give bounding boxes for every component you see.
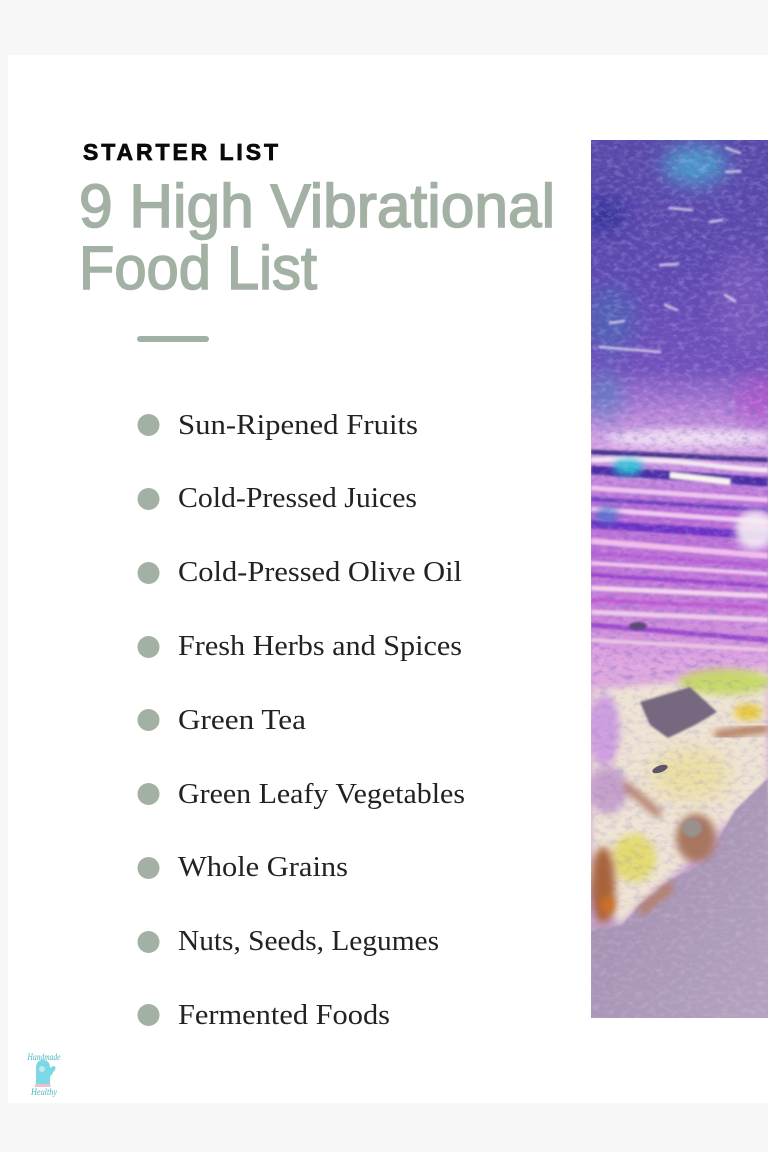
- item: Whole Grains: Whole Grains: [178, 851, 348, 883]
- food list: [138, 409, 465, 1031]
- logo text top: Handmade: [27, 1052, 60, 1062]
- item: Green Tea: Green Tea: [178, 704, 306, 736]
- item: Sun-Ripened Fruits: Sun-Ripened Fruits: [178, 409, 418, 441]
- icon: oven mitt: [35, 1060, 56, 1087]
- item: Cold-Pressed Juices: Cold-Pressed Juices: [178, 482, 417, 514]
- small highlights upper crystal: [600, 148, 740, 352]
- title divider bar: [137, 336, 209, 342]
- eyebrow: starter list: STARTER LIST: [83, 139, 278, 165]
- dark inclusions and rust: [640, 687, 717, 738]
- item: Fresh Herbs and Spices: Fresh Herbs and Spices: [178, 630, 462, 662]
- title: [79, 172, 555, 302]
- logo text bottom: Healthy: [30, 1087, 57, 1097]
- striped band: [591, 452, 768, 650]
- item: Nuts, Seeds, Legumes: Nuts, Seeds, Legumes: [178, 925, 439, 957]
- photo: iridescent crystal: [584, 140, 768, 1018]
- logo: Handmade Healthy oven mitt: [27, 1052, 60, 1097]
- item: Fermented Foods: Fermented Foods: [178, 999, 390, 1031]
- title: 9 High Vibrational: [79, 172, 555, 240]
- lilac lower crystal: [591, 778, 768, 1018]
- item: Cold-Pressed Olive Oil: Cold-Pressed Olive Oil: [178, 556, 462, 588]
- item: Green Leafy Vegetables: Green Leafy Vegetables: [178, 778, 465, 810]
- bright mineral zone: [591, 670, 768, 925]
- title: Food List: [79, 234, 317, 302]
